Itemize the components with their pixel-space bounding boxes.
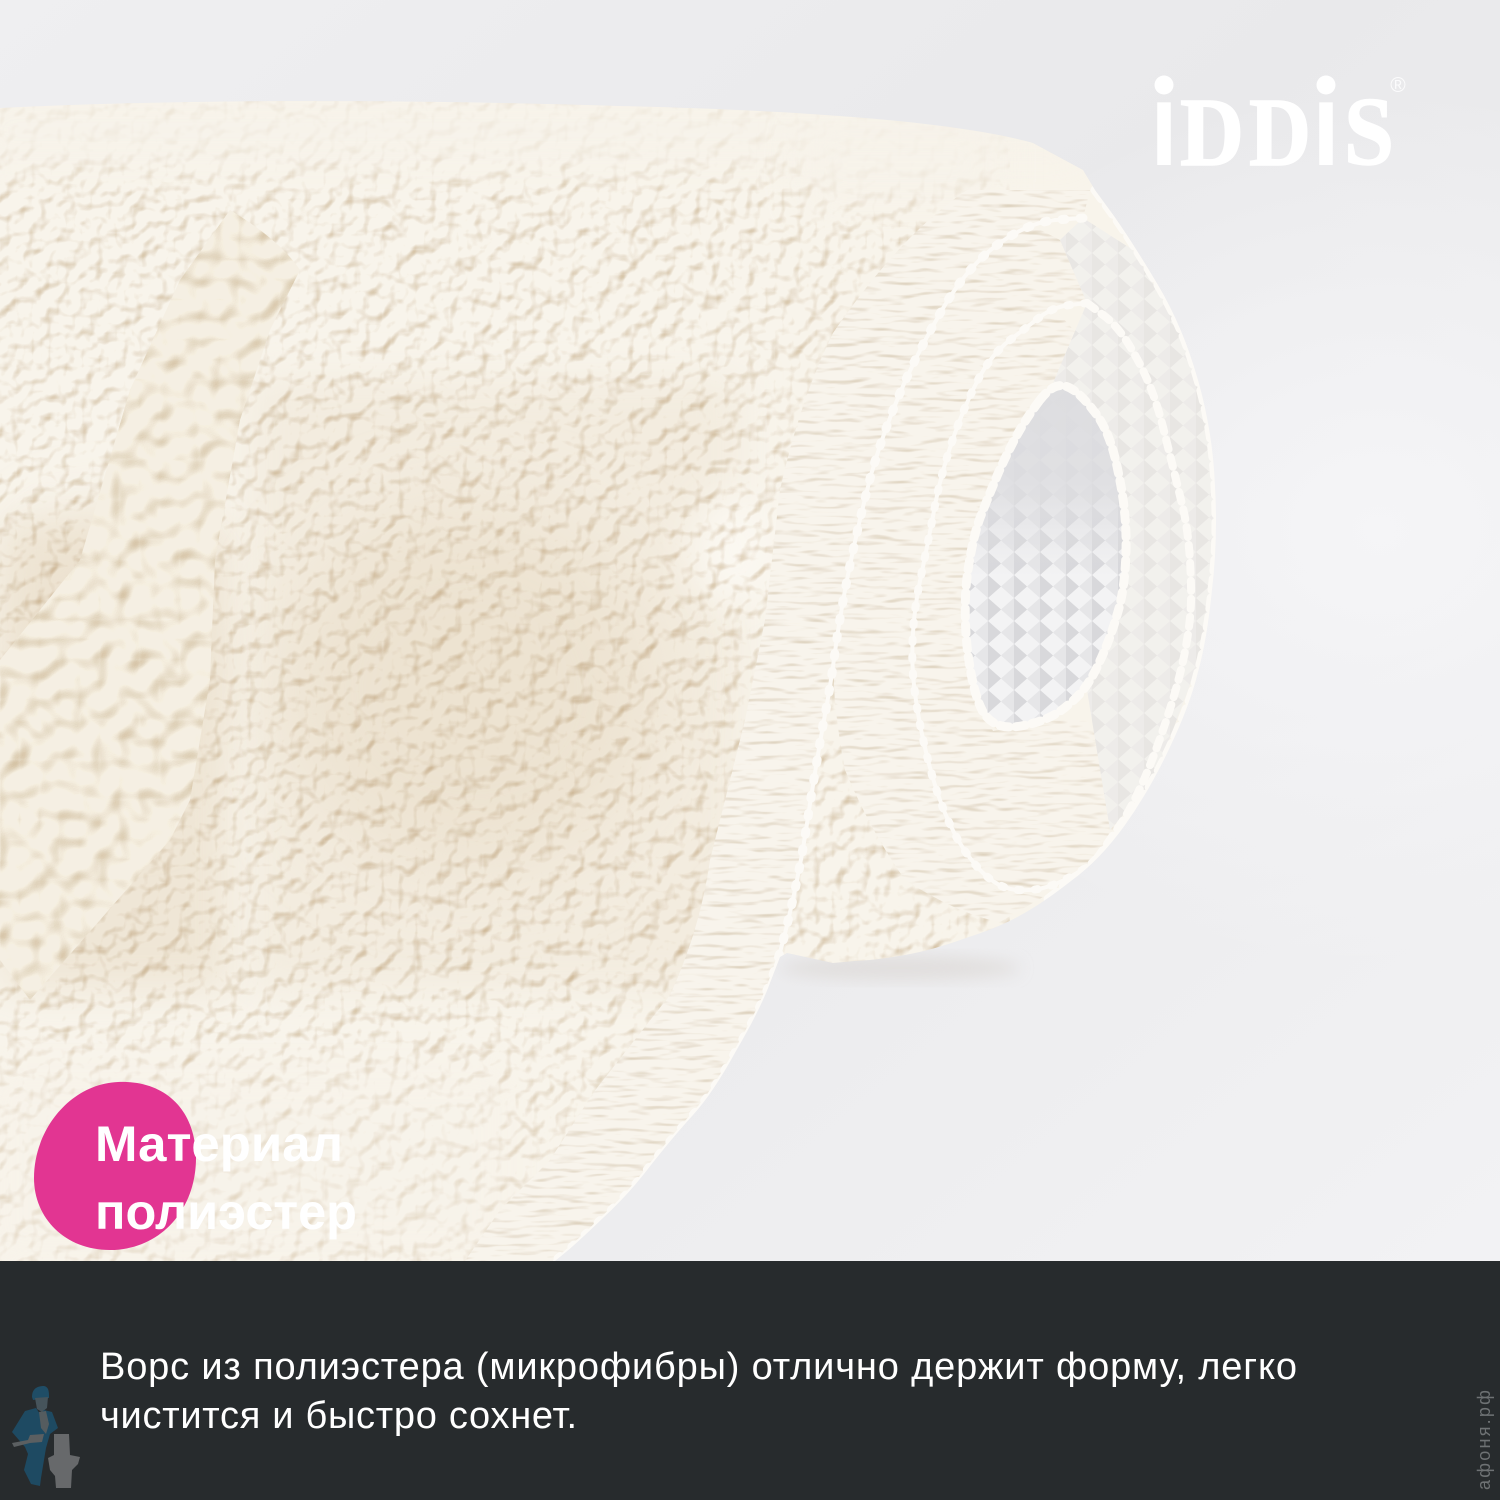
logo: iDDiS: S: [1344, 78, 1394, 186]
out of focus top and lower pile highlights: [0, 90, 1090, 170]
dark caption band: [0, 1261, 1500, 1500]
inner hole of the roll with triangular backing: [968, 389, 1123, 724]
floor shadow under the roll: [780, 956, 1020, 980]
caption text: чистится и быстро сохнет.: [100, 1395, 577, 1437]
front hem band: [466, 190, 1114, 1261]
caption text: Ворс из полиэстера (микрофибры) отлично держит форму, легко: [100, 1346, 1297, 1388]
pile shading: [0, 380, 780, 990]
logo: iDDiS: I: [1151, 84, 1177, 185]
pink blob badge: [34, 1082, 196, 1250]
wool pile texture: [0, 95, 1010, 1265]
watermark: site name: афоня.рф: [1474, 1390, 1494, 1490]
heading: material: полиэстер: [95, 1184, 357, 1240]
caption text: [100, 1346, 1297, 1437]
heading: material: [95, 1116, 357, 1240]
heading: material: Материал: [95, 1116, 343, 1172]
logo: iDDiS: D: [1249, 79, 1311, 187]
looped bead column: [0, 200, 310, 1010]
logo: iDDiS: ®: [1390, 74, 1406, 97]
logo: iDDiS: I: [1313, 84, 1339, 185]
icon: plumber watermark: [12, 1386, 80, 1488]
logo: iDDiS: [1151, 74, 1406, 187]
logo: iDDiS: D: [1180, 79, 1244, 187]
mat backing seen inside the roll: [1054, 220, 1214, 829]
rolled bath mat photo: [0, 101, 1216, 1261]
rope edge stitching: [555, 190, 1216, 1261]
